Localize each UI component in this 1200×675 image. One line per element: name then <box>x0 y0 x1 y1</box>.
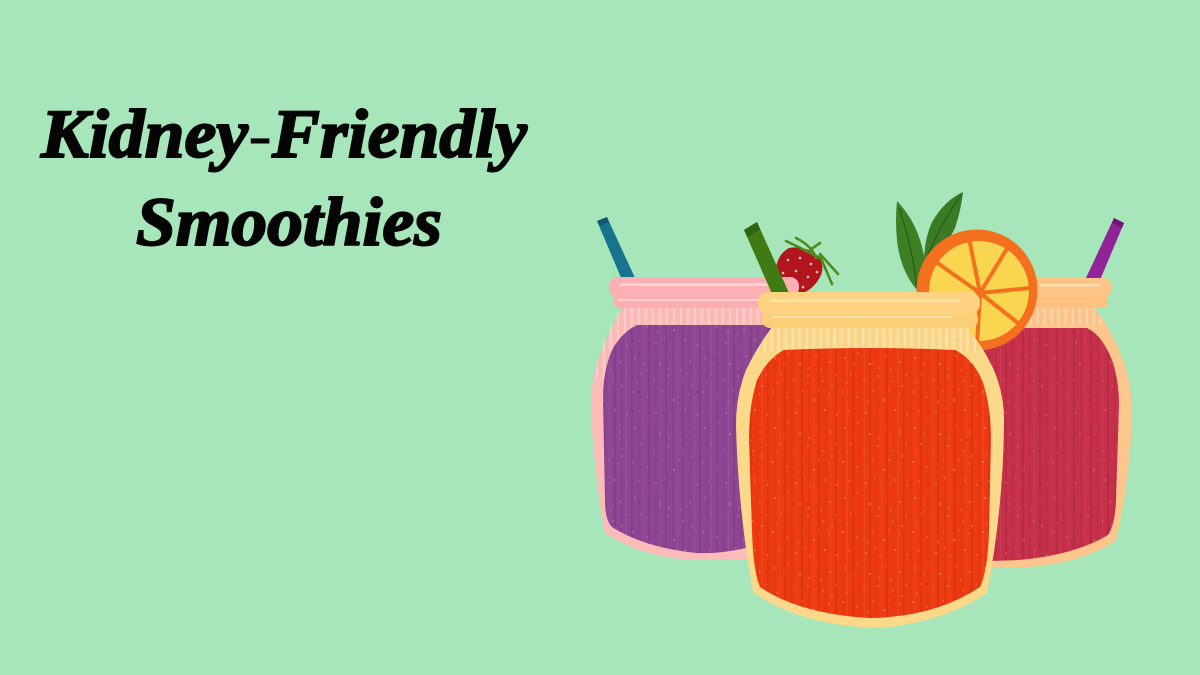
icon: orange slice <box>916 230 1038 350</box>
icon: teal straw <box>597 217 635 280</box>
icon: pink jar with purple smoothie <box>591 277 799 560</box>
title: Smoothies <box>136 184 442 260</box>
icon: purple straw <box>1086 218 1124 280</box>
title <box>40 96 527 260</box>
title: Kidney-Friendly <box>40 96 527 172</box>
icon: front jar with orange-red smoothie <box>736 292 1004 628</box>
icon: jar with red smoothie, back right <box>960 278 1132 567</box>
icon: three smoothie jars <box>591 192 1132 628</box>
icon: mint leaves <box>896 192 963 290</box>
icon: green straw <box>744 222 789 296</box>
icon: strawberry <box>776 238 838 293</box>
